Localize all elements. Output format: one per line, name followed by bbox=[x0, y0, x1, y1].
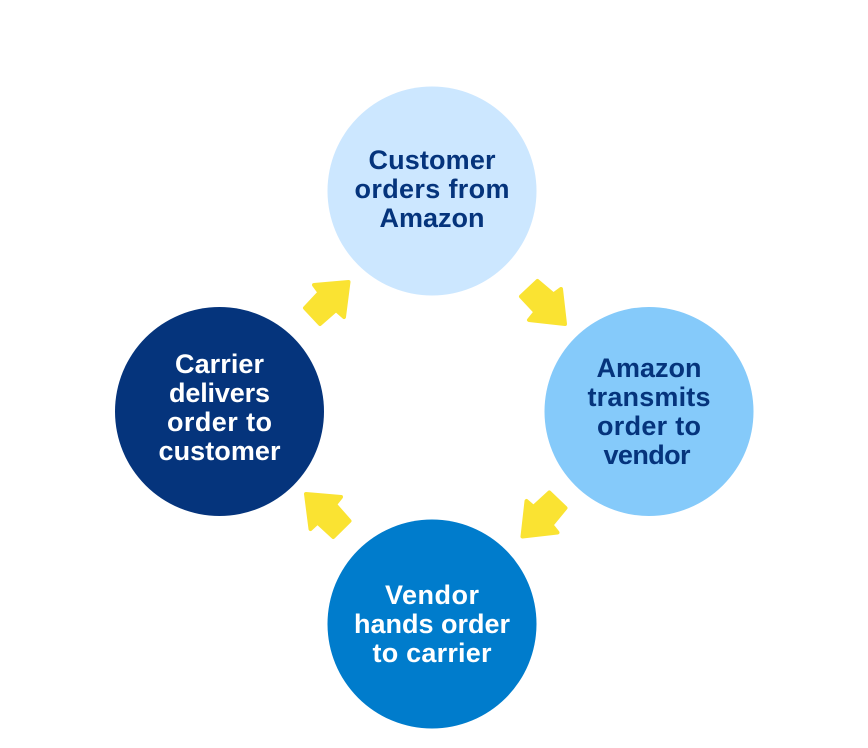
step 3: vendor hands order to carrier bbox=[328, 520, 536, 728]
step 4: carrier delivers order to customer: customer bbox=[158, 436, 281, 466]
step 4: carrier delivers order to customer: order to bbox=[167, 407, 272, 437]
step 2: Amazon transmits order to vendor: vendor bbox=[604, 440, 691, 470]
arrow: step 4 to step 1 bbox=[305, 282, 348, 324]
step 3: vendor hands order to carrier: hands order bbox=[354, 609, 510, 639]
step 4: carrier delivers order to customer: delivers bbox=[169, 378, 270, 408]
arrow: step 2 to step 3 bbox=[522, 492, 566, 536]
step 3: vendor hands order to carrier: to carrier bbox=[372, 638, 492, 668]
step 2: Amazon transmits order to vendor: order to bbox=[597, 411, 701, 441]
arrow: step 1 to step 2 bbox=[521, 281, 565, 324]
step 4: carrier delivers order to customer bbox=[115, 307, 324, 516]
step 1: customer orders from Amazon: orders from bbox=[354, 174, 510, 204]
step 2: Amazon transmits order to vendor: Amazon bbox=[596, 353, 702, 383]
step 2: Amazon transmits order to vendor bbox=[544, 307, 754, 516]
step 1: customer orders from Amazon bbox=[328, 86, 536, 296]
arrow: step 3 to step 4 bbox=[306, 494, 350, 537]
step 4: carrier delivers order to customer: Carrier bbox=[175, 349, 264, 379]
step 2: Amazon transmits order to vendor: transmits bbox=[588, 382, 710, 412]
step 1: customer orders from Amazon: Amazon bbox=[380, 203, 484, 233]
step 1: customer orders from Amazon: Customer bbox=[368, 145, 496, 175]
step 3: vendor hands order to carrier: Vendor bbox=[385, 580, 479, 610]
